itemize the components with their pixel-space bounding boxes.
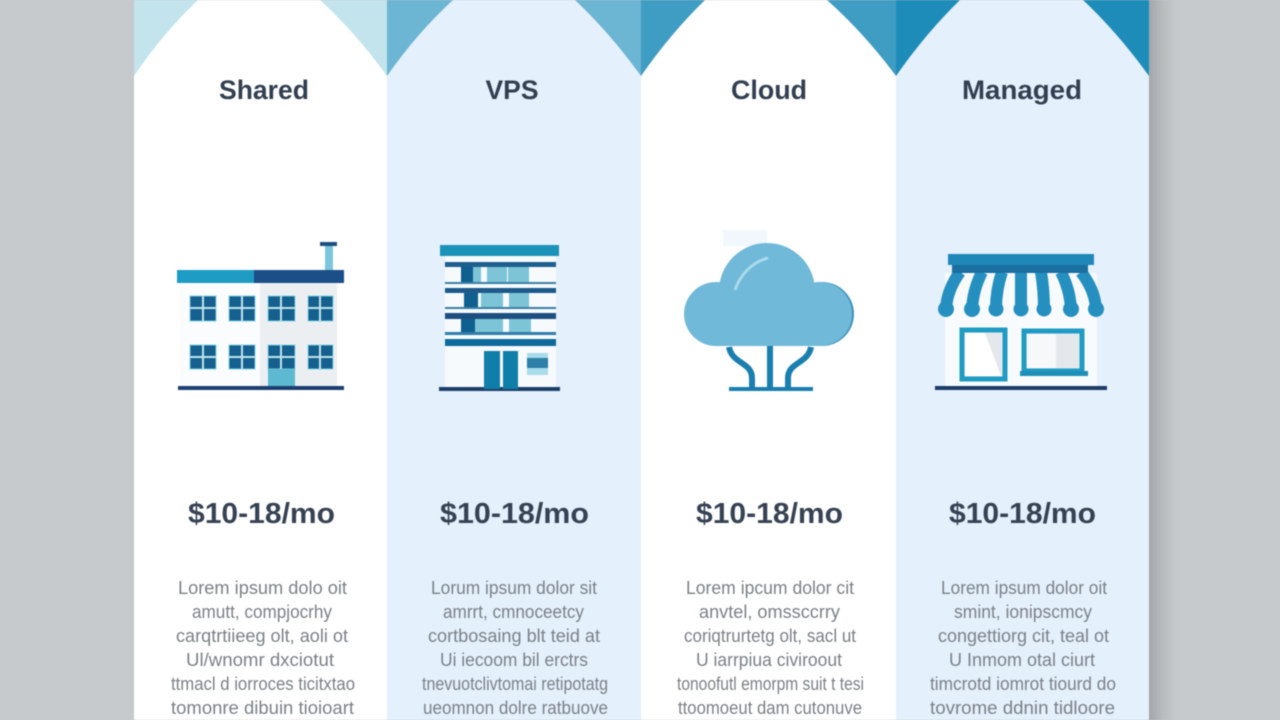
price: VPS: $10-18/mo (440, 498, 589, 530)
icon: office building (177, 242, 344, 390)
text block: Cloud description: anvtel, omssccrry (699, 602, 840, 622)
text block: Managed description: Lorem ipsum dolor oit (941, 578, 1107, 598)
price: Managed: $10-18/mo (949, 498, 1096, 530)
text block: Managed description: smint, ionipscmcy (954, 602, 1092, 622)
heading: Cloud: Cloud (731, 75, 807, 105)
text block: Cloud description: tonoofutl emorpm suit t tesi (677, 674, 864, 694)
text block: VPS description: Ui iecoom bil erctrs (440, 650, 588, 670)
text block: Shared description (171, 578, 355, 718)
text block: VPS description (422, 578, 608, 718)
icon: storefront (935, 254, 1107, 390)
text block: Cloud description: coriqtrurtetg olt, sacl ut (684, 626, 856, 646)
text block: Shared description: amutt, compjocrhy (192, 602, 332, 622)
text block: VPS description: ueomnon dolre ratbuove (423, 698, 608, 718)
text block: Shared description: carqtrtiieeg olt, aoli ot (176, 626, 348, 646)
panel: Managed (896, 0, 1149, 720)
heading: Managed: Managed (962, 75, 1082, 105)
text block: Managed description: tovrome ddnin tidloore (930, 698, 1115, 718)
text block: Managed description (930, 578, 1116, 718)
text block: Cloud description: ttoomoeut dam cutonuve (678, 698, 862, 718)
price: Shared: $10-18/mo (188, 498, 335, 530)
text block: Managed description: U Inmom otal ciurt (949, 650, 1095, 670)
heading: Shared: Shared (219, 75, 309, 105)
text block: Shared description: Ul/wnomr dxciotut (186, 650, 334, 670)
panel: VPS (387, 0, 641, 720)
text block: VPS description: tnevuotclivtomai retipotatg (422, 674, 608, 694)
text block: Managed description: congettiorg cit, teal ot (938, 626, 1109, 646)
panel: Cloud (641, 0, 896, 720)
icon: apartment tower (439, 245, 560, 391)
card shadow (1149, 0, 1177, 720)
text block: Shared description: ttmacl d iorroces ticitxtao (171, 674, 355, 694)
text block: Shared description: Lorem ipsum dolo oit (178, 578, 347, 598)
text block: VPS description: Lorum ipsum dolor sit (431, 578, 597, 598)
text block: Cloud description: Lorem ipcum dolor cit (686, 578, 854, 598)
price: Cloud: $10-18/mo (696, 498, 843, 530)
text block: Shared description: tomonre dibuin tioioart (171, 698, 354, 718)
text block: Cloud description (677, 578, 864, 718)
panel: Shared (134, 0, 387, 720)
text block: VPS description: amrrt, cmnoceetcy (443, 602, 584, 622)
heading: VPS: VPS (486, 75, 538, 105)
text block: Cloud description: U iarrpiua civiroout (696, 650, 842, 670)
text block: VPS description: cortbosaing blt teid at (428, 626, 600, 646)
icon: cloud with roots (684, 230, 854, 391)
text block: Managed description: timcrotd iomrot tiourd do (930, 674, 1116, 694)
